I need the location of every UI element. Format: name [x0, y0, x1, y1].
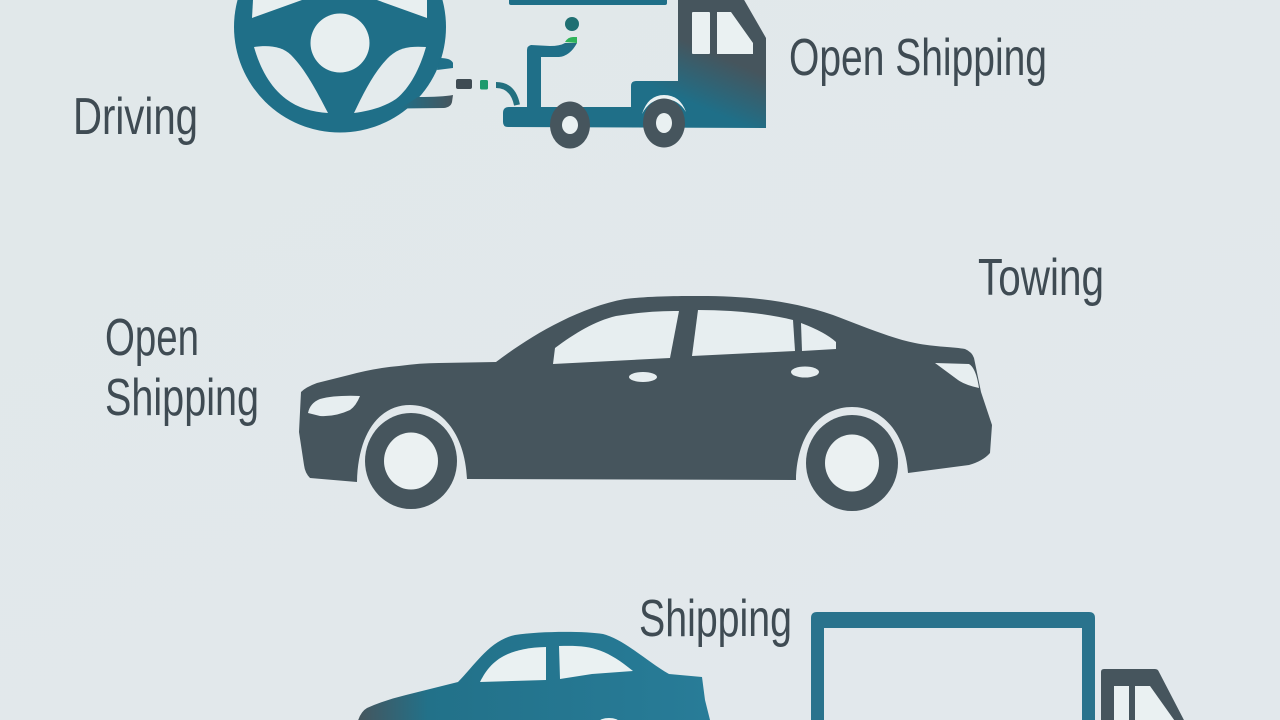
icon: teal car, cropped: [357, 632, 711, 720]
label: Driving: Driving: [73, 88, 198, 146]
front side window: [553, 311, 679, 364]
taillight: [935, 363, 979, 388]
label: Towing: Towing: [978, 249, 1104, 307]
rear wheel: [550, 102, 590, 148]
icon: connector between wheel and truck: [400, 58, 517, 108]
label: Open Shipping (top): Open Shipping: [789, 29, 1047, 87]
front wheel: [643, 98, 685, 148]
label: Open Shipping (left, two lines): Open: [105, 309, 199, 367]
rear side window: [692, 310, 795, 356]
front wheel: [365, 413, 457, 509]
headlight: [308, 396, 360, 416]
door handle front: [629, 372, 657, 382]
icon: open shipping truck: [503, 0, 766, 148]
truck cab: [1101, 669, 1186, 720]
icon: box truck, cropped: [811, 612, 1186, 720]
rear wheel: [806, 415, 898, 511]
icon: dark sedan silhouette: [299, 296, 992, 511]
icon: steering wheel: [234, 0, 446, 132]
quarter window: [801, 323, 836, 351]
label: Shipping (bottom): Shipping: [639, 590, 792, 648]
door handle rear: [791, 366, 819, 378]
label: Open Shipping (left, two lines): Shipping: [105, 369, 259, 427]
label: Open Shipping (left, two lines): [105, 309, 259, 427]
